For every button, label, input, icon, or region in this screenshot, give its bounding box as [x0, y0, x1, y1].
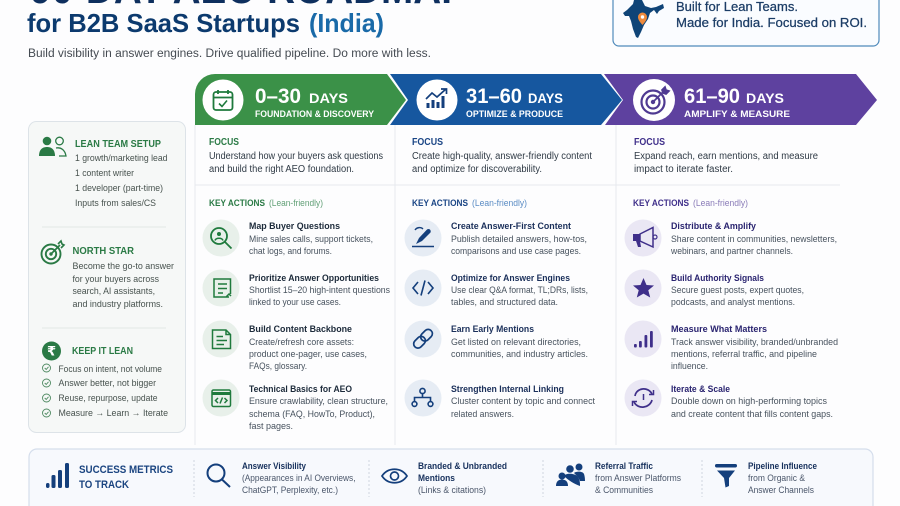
action: prioritize answer opportunities [202, 270, 390, 307]
key actions heading [412, 198, 527, 209]
focus text: Create high-quality, answer-friendly content [412, 151, 592, 162]
action: prioritize answer opportunities: Prioritize Answer Opportunities [249, 273, 379, 284]
metrics heading: SUCCESS METRICS [79, 464, 173, 476]
key actions heading: (Lean-friendly) [269, 198, 323, 208]
action: build content backbone [202, 320, 367, 371]
icon: document [212, 330, 230, 348]
action: technical basics for AEO: Technical Basics for AEO [249, 384, 352, 395]
title: (India) [309, 8, 384, 38]
metric: pipeline influence [715, 461, 817, 495]
metric: answer visibility: ChatGPT, Perplexity, etc.) [242, 484, 338, 495]
key actions heading: KEY ACTIONS [412, 198, 468, 209]
section: keep it lean: Reuse, repurpose, update [58, 392, 158, 403]
action: optimize for answer engines [404, 270, 588, 307]
section: lean team setup [39, 137, 168, 208]
focus text [634, 137, 818, 175]
action: iterate and scale: and create content that fills content gaps. [671, 408, 833, 419]
focus text: FOCUS [634, 137, 665, 148]
panel: success metrics [29, 449, 873, 506]
metric: pipeline influence: Answer Channels [748, 484, 814, 495]
action: strengthen internal linking: Strengthen Internal Linking [451, 384, 564, 395]
panel: column 2 optimize [404, 137, 595, 419]
icon: hierarchy [412, 388, 433, 406]
column frame lines [195, 125, 840, 445]
icon: signal bars [634, 331, 653, 348]
action: build content backbone: FAQs, glossary. [249, 360, 307, 371]
icon: code window [212, 390, 230, 406]
action: distribute and amplify [624, 220, 837, 256]
action: iterate and scale: Iterate & Scale [671, 384, 730, 395]
metric: answer visibility [208, 461, 356, 495]
action: measure what matters: Measure What Matters [671, 324, 767, 335]
section: keep it lean: KEEP IT LEAN [72, 345, 133, 357]
action: prioritize answer opportunities: Shortlist 15–20 high-intent questions [249, 284, 390, 295]
icon: people [556, 464, 585, 486]
callout: built for lean teams [613, 0, 879, 46]
icon: star [633, 278, 654, 298]
icon: chain link [412, 328, 434, 350]
section: keep it lean: Measure → Learn → Iterate [58, 407, 168, 418]
action: distribute and amplify: Share content in communities, newsletters, [671, 233, 837, 244]
key actions heading [633, 198, 748, 209]
action: build content backbone: product one-pager, use cases, [249, 348, 367, 359]
action: create answer-first content: Create Answer-First Content [451, 221, 572, 232]
section: north star: NORTH STAR [72, 245, 134, 257]
icon: team [39, 137, 66, 156]
icon: magnifier [208, 464, 230, 487]
action: create answer-first content [404, 220, 587, 256]
action: prioritize answer opportunities: linked to your use cases. [249, 296, 341, 307]
icon: target [42, 241, 64, 264]
metric: referral traffic [556, 461, 681, 495]
action: technical basics for AEO: Ensure crawlability, clean structure, [249, 395, 388, 406]
action: distribute and amplify: Distribute & Amplify [671, 221, 757, 232]
action: strengthen internal linking: Cluster content by topic and connect [451, 395, 595, 406]
key actions heading: (Lean-friendly) [693, 198, 748, 208]
metric: branded and unbranded mentions: Branded & Unbranded [418, 461, 507, 471]
title: for B2B SaaS Startups [27, 8, 300, 38]
icon: growth chart [416, 80, 458, 120]
section: keep it lean: Focus on intent, not volume [58, 363, 162, 374]
action: build authority signals: Build Authority Signals [671, 273, 764, 284]
metrics heading: TO TRACK [79, 479, 129, 491]
icon: eye [382, 469, 407, 483]
subtitle: Build visibility in answer engines. Drive qualified pipeline. Do more with less. [28, 48, 431, 60]
focus text: FOCUS [209, 137, 239, 148]
action: optimize for answer engines: Optimize for Answer Engines [451, 273, 570, 284]
focus text [209, 137, 383, 175]
action: create answer-first content: comparisons and use case pages. [451, 245, 581, 256]
action: distribute and amplify: webinars, and partner channels. [670, 245, 793, 256]
action: earn early mentions: Get listed on relevant directories, [451, 336, 581, 347]
key actions heading: (Lean-friendly) [472, 198, 527, 208]
section: lean team setup: 1 growth/marketing lead [75, 152, 168, 163]
banner: 0-30 days: FOUNDATION & DISCOVERY [255, 109, 374, 119]
section: keep it lean: Answer better, not bigger [58, 377, 156, 388]
focus text: Expand reach, earn mentions, and measure [634, 151, 818, 162]
focus text: impact to iterate faster. [634, 164, 733, 175]
action: build content backbone: Create/refresh core assets: [249, 336, 354, 347]
metric: answer visibility: Answer Visibility [242, 461, 307, 471]
callout: built for lean teams: Made for India. Focused on ROI. [676, 16, 867, 30]
icon: calendar [202, 80, 244, 120]
action: iterate and scale: Double down on high-performing topics [671, 395, 827, 406]
key actions heading [209, 198, 323, 209]
metric: pipeline influence: Pipeline Influence [748, 461, 817, 471]
icon: India map with pin [623, 0, 664, 38]
icon: megaphone [633, 228, 657, 247]
action: build authority signals: podcasts, and analyst mentions. [671, 296, 795, 307]
action: map buyer questions [202, 220, 373, 256]
action: measure what matters [624, 320, 838, 371]
action: optimize for answer engines: Use clear Q&A format, TL;DRs, lists, [451, 284, 588, 295]
section: keep it lean [42, 342, 168, 418]
banner: 61-90 days: 61–90 [684, 85, 740, 108]
metric: answer visibility: (Appearances in AI Overviews, [242, 472, 356, 483]
action: create answer-first content: Publish detailed answers, how-tos, [451, 233, 587, 244]
action: iterate and scale [624, 380, 833, 419]
focus text: and optimize for discoverability. [412, 164, 542, 175]
banner: 61-90 days: AMPLIFY & MEASURE [684, 109, 790, 119]
section: lean team setup: Inputs from sales/CS [75, 197, 156, 208]
metric: referral traffic: & Communities [595, 484, 653, 495]
action: build content backbone: Build Content Backbone [249, 324, 352, 335]
title [27, 0, 467, 38]
action: measure what matters: Track answer visibility, branded/unbranded [671, 336, 838, 347]
callout: built for lean teams: Built for Lean Teams. [676, 0, 798, 14]
focus text: and build the right AEO foundation. [209, 164, 354, 175]
focus text [412, 137, 592, 175]
action: map buyer questions: Map Buyer Questions [249, 221, 340, 232]
action: technical basics for AEO [202, 380, 388, 431]
section: north star [42, 241, 174, 309]
action: measure what matters: influence. [671, 360, 708, 371]
icon: bars [46, 463, 69, 488]
banner: 0-30 days: 0–30 [255, 85, 301, 108]
action: measure what matters: mentions, referral traffic, and pipeline [671, 348, 817, 359]
banner: 0-30 days [195, 74, 406, 125]
metric: branded and unbranded mentions: Mentions [418, 473, 455, 483]
icon: checklist document [214, 279, 231, 297]
icon: rupee: ₹ [47, 344, 56, 360]
section: lean team setup: 1 developer (part-time) [75, 182, 163, 193]
panel: column 3 amplify [624, 137, 838, 419]
icon: funnel [715, 464, 737, 488]
section: north star: search, AI assistants, [72, 285, 155, 296]
icon: magnifier with person [211, 228, 232, 248]
key actions heading: KEY ACTIONS [209, 198, 265, 209]
action: earn early mentions: Earn Early Mentions [451, 324, 534, 335]
banner: 31-60 days [390, 74, 622, 125]
banner: 31-60 days: OPTIMIZE & PRODUCE [466, 109, 563, 119]
focus text: Understand how your buyers ask questions [209, 151, 383, 162]
banner: 31-60 days: DAYS [528, 90, 563, 106]
section: lean team setup: LEAN TEAM SETUP [75, 138, 161, 150]
focus text: FOCUS [412, 137, 443, 148]
metric: branded and unbranded mentions: (Links & citations) [418, 484, 486, 495]
action: strengthen internal linking [404, 380, 595, 419]
icon: refresh cycle [632, 389, 654, 407]
action: optimize for answer engines: tables, and structured data. [451, 296, 558, 307]
section: north star: and industry platforms. [72, 298, 163, 309]
section: north star: for your buyers across [72, 273, 159, 284]
panel: column 1 foundation [202, 137, 390, 431]
banner: 0-30 days: DAYS [309, 90, 348, 106]
panel: left sidebar [28, 122, 186, 432]
action: earn early mentions: communities, and industry articles. [451, 348, 588, 359]
icon: code brackets [413, 280, 433, 296]
action: technical basics for AEO: schema (FAQ, HowTo, Product), [249, 408, 375, 419]
section: north star: Become the go-to answer [72, 260, 174, 271]
icon: check marks [42, 364, 50, 417]
action: build authority signals [624, 270, 804, 307]
banner: 61-90 days [604, 74, 877, 125]
metric: branded and unbranded mentions [382, 461, 507, 495]
action: technical basics for AEO: fast pages. [249, 420, 293, 431]
action: map buyer questions: Mine sales calls, support tickets, [249, 233, 373, 244]
action: build authority signals: Secure guest posts, expert quotes, [671, 284, 804, 295]
action: map buyer questions: chat logs, and forums. [249, 245, 332, 256]
banner: 61-90 days: DAYS [746, 90, 784, 106]
key actions heading: KEY ACTIONS [633, 198, 689, 209]
metric: pipeline influence: from Organic & [748, 472, 806, 483]
icon: target [633, 79, 675, 121]
icon: pen [412, 228, 434, 246]
metric: referral traffic: Referral Traffic [595, 461, 653, 471]
action: strengthen internal linking: related answers. [451, 408, 514, 419]
action: earn early mentions [404, 320, 588, 359]
metric: referral traffic: from Answer Platforms [595, 472, 681, 483]
section: lean team setup: 1 content writer [75, 167, 134, 178]
banner: 31-60 days: 31–60 [466, 85, 522, 108]
metrics heading [46, 463, 173, 491]
